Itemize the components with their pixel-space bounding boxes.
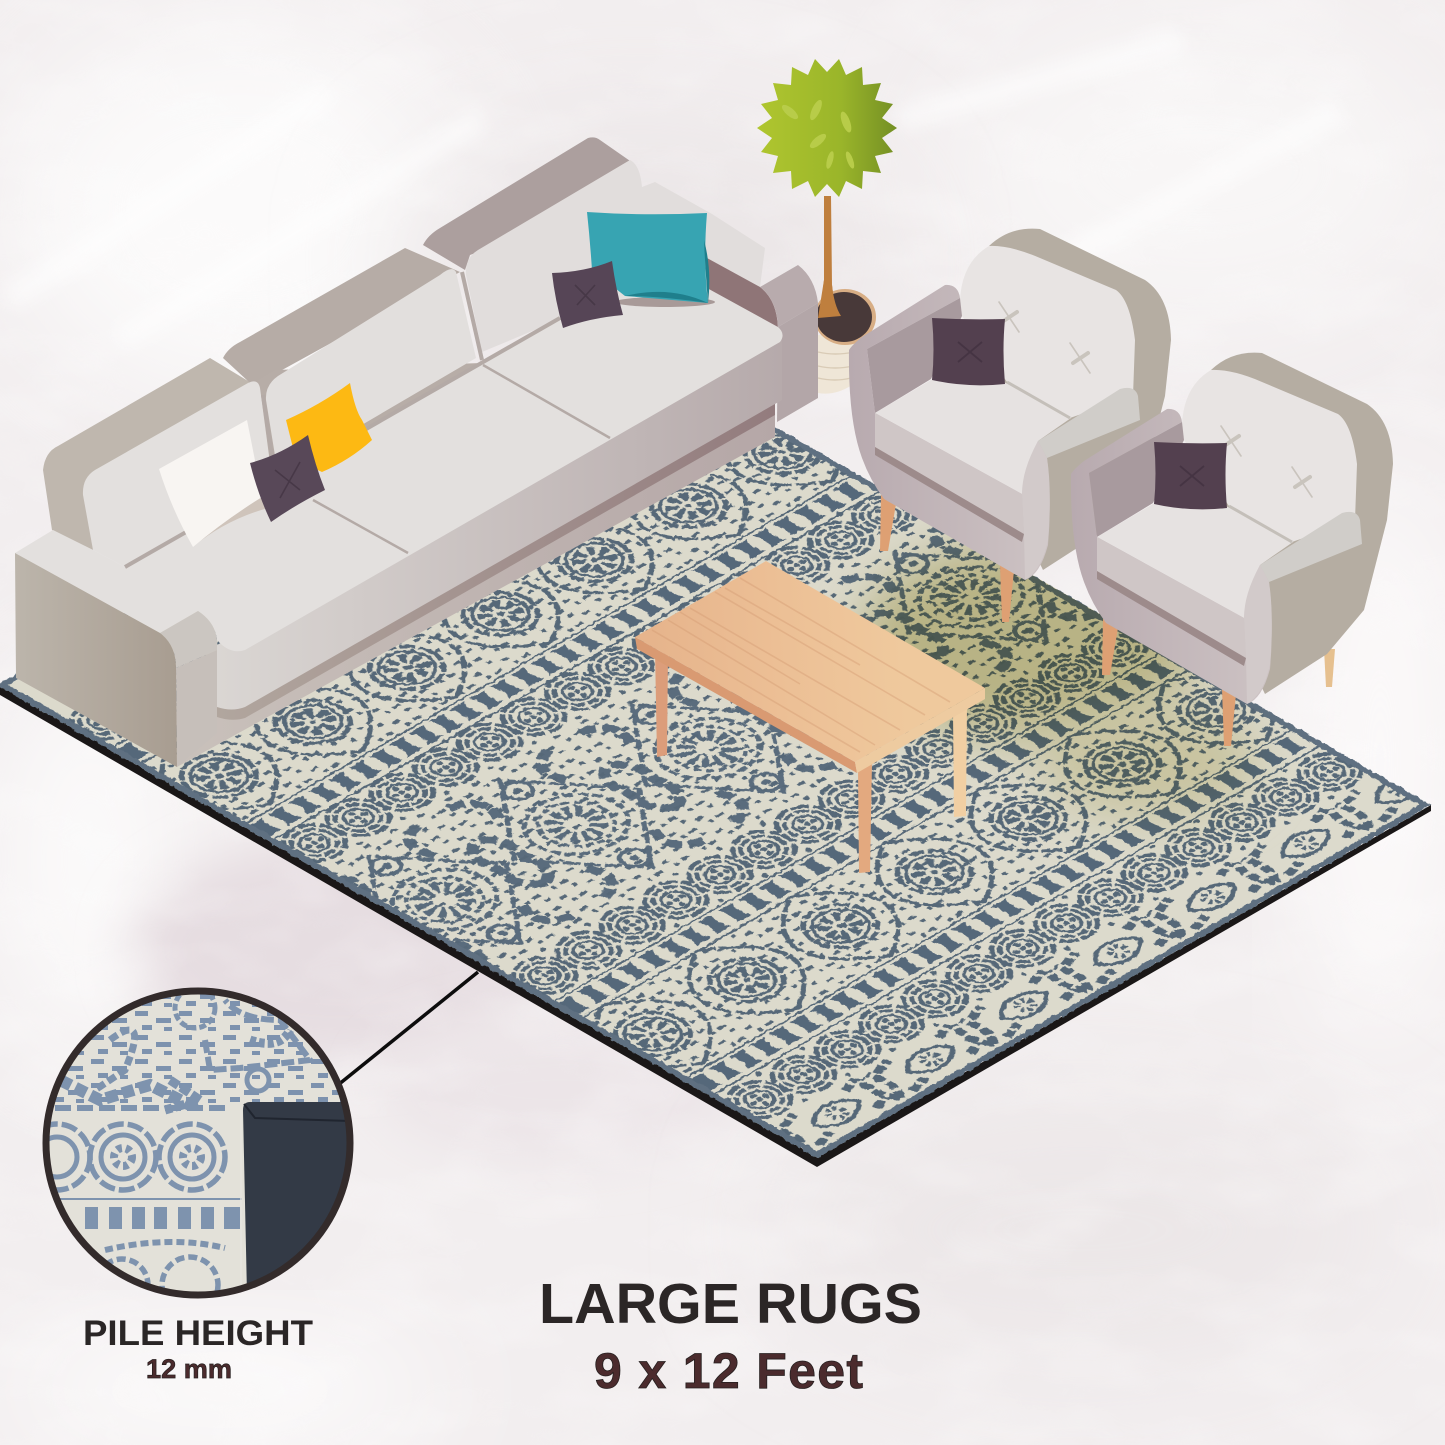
rug: thin band lines xyxy=(114,472,1326,1094)
rug row: rings 1 xyxy=(711,744,1378,1127)
inset: dark ring border xyxy=(46,991,350,1295)
sofa: gap behind cushions xyxy=(258,363,482,486)
sofa: seat seams xyxy=(125,272,610,567)
sofa: base xyxy=(177,400,775,767)
plant: foliage crown xyxy=(757,59,897,197)
armchair 1: legs xyxy=(880,495,1014,622)
inset circle: rug corner close-up xyxy=(24,988,350,1313)
inset: dark backing xyxy=(243,1102,350,1295)
armchair 1: seat xyxy=(875,380,1071,494)
armchair 2: apron xyxy=(1097,537,1246,658)
rug row: ladder 2 xyxy=(552,652,1189,1018)
plant: pot body xyxy=(818,335,858,394)
connector line from rug to inset circle xyxy=(338,972,478,1085)
coffee table xyxy=(635,561,985,873)
label: PILE HEIGHT: PILE HEIGHT xyxy=(83,1314,313,1353)
rug row: flowers 2 xyxy=(135,412,853,825)
armchair 2: right arm front xyxy=(1244,565,1272,704)
inset: rug face xyxy=(24,988,350,1313)
plant xyxy=(757,59,897,394)
pillow: teal xyxy=(587,212,715,307)
rug row: flowers 1 xyxy=(576,666,1294,1079)
sofa: seat top xyxy=(15,258,783,651)
armchair 2: seat xyxy=(1097,504,1293,618)
armchair 1: stripe xyxy=(875,447,1024,542)
armchair 1: apron xyxy=(875,413,1024,534)
armchair 2 xyxy=(1071,353,1393,746)
table: legs xyxy=(655,650,967,873)
rug row: rings 2 xyxy=(496,620,1163,1003)
armchair 1: right arm front xyxy=(1022,441,1050,580)
armchair 1: pillow xyxy=(932,318,1005,385)
armchair 2: right arm top xyxy=(1260,512,1362,582)
table: wood grain xyxy=(652,578,950,752)
armchair 1: back cushion xyxy=(960,246,1135,418)
rug row: central medallions xyxy=(319,518,1109,972)
armchair 1: arm inner xyxy=(867,298,962,413)
label: 12 mm: 12 mm xyxy=(146,1354,232,1384)
table: right edge xyxy=(855,688,985,773)
rug row: edge motifs near front xyxy=(764,774,1426,1155)
rug row: ladder 4 xyxy=(118,725,177,760)
pillow: yellow xyxy=(286,383,372,472)
armchair 2: body xyxy=(1071,409,1272,704)
table: top surface xyxy=(635,561,985,762)
pillow: white xyxy=(159,420,268,547)
armchair 2: stripe xyxy=(1097,571,1246,666)
table: front edge xyxy=(635,637,857,773)
rug row: ladder 1 xyxy=(684,728,1321,1094)
sofa: back bolsters xyxy=(43,137,640,550)
pillow: dark purple on right xyxy=(552,261,623,328)
sofa: right arm inner xyxy=(707,258,778,328)
sofa: middle back cushion xyxy=(266,269,476,474)
rug border xyxy=(0,428,1432,1158)
inset: ring medallions xyxy=(24,1124,225,1190)
armchair 1: back shell xyxy=(960,229,1171,570)
armchair 1 xyxy=(849,229,1171,622)
sofa: left arm xyxy=(15,553,217,767)
armchair 2: legs xyxy=(1102,619,1335,746)
armchair 2: tufts xyxy=(1221,426,1312,497)
armchair 1: seat seam xyxy=(1007,382,1070,418)
rug row: ladder 3 xyxy=(243,474,880,840)
rug: black edge thickness xyxy=(0,684,1431,1167)
sofa: left back cushion xyxy=(83,381,272,567)
sofa: front apron xyxy=(217,335,782,710)
plant: pot soil and rim xyxy=(814,280,876,345)
rug row: rings 4 xyxy=(68,630,220,742)
armchair 2: pillow xyxy=(1154,442,1227,509)
armchair 2: back cushion xyxy=(1182,370,1357,542)
sofa: base stripe xyxy=(217,395,775,720)
sofa: right arm xyxy=(760,265,818,422)
sofa: right back cushion xyxy=(466,160,765,352)
sofa xyxy=(15,137,818,767)
inset: scattered flecks xyxy=(46,991,350,1103)
inset: upper ornament xyxy=(55,988,310,1110)
plant: trunk xyxy=(817,196,841,318)
armchair 2: back shell xyxy=(1182,353,1393,694)
armchair 2: seat seam xyxy=(1229,506,1292,542)
inset: bottom ornament xyxy=(96,1242,225,1313)
subtitle: 9 x 12 Feet: 9 x 12 Feet xyxy=(594,1343,863,1399)
armchair 2: arm inner xyxy=(1089,422,1184,537)
rug: patterned surface xyxy=(0,428,1432,1158)
armchair 1: body xyxy=(849,285,1050,580)
armchair 1: tufts xyxy=(999,302,1090,373)
armchair 1: right arm top xyxy=(1038,388,1140,458)
inset: lower lines and ladder xyxy=(60,1199,242,1229)
rug row: rings 3 xyxy=(266,487,933,871)
rug: olive shading near the chairs xyxy=(860,540,1260,820)
pillow: dark purple on left xyxy=(250,435,325,522)
title: LARGE RUGS: LARGE RUGS xyxy=(539,1272,922,1336)
